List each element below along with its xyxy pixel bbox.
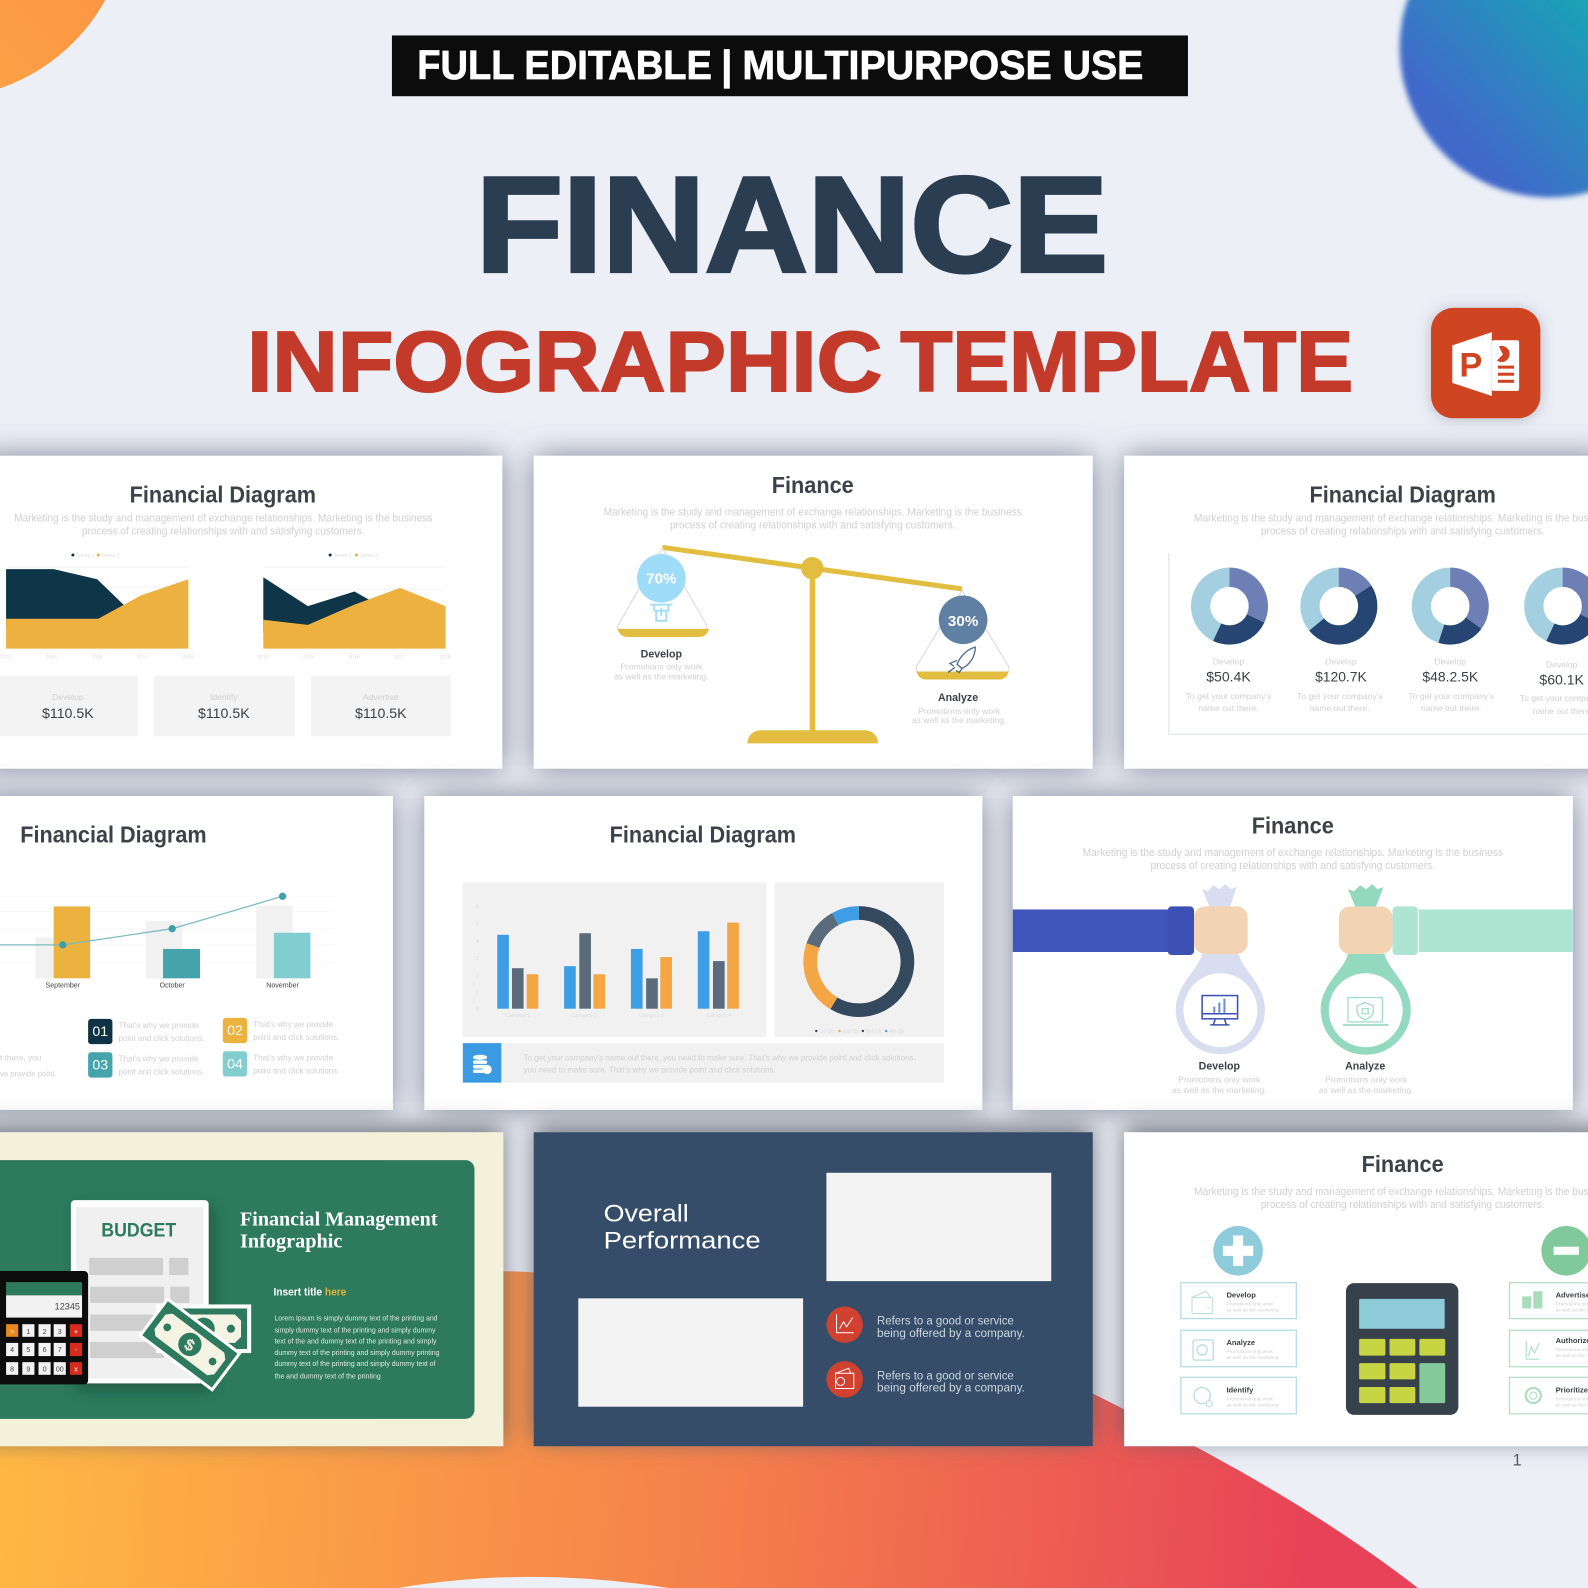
text: first point [877,1315,1025,1340]
calculator: 3 [58,1328,62,1336]
donut 2 label [1297,656,1383,713]
item identify [1181,1377,1296,1414]
description [1194,513,1588,538]
icon: PowerPoint: P [1459,347,1482,385]
grouped bar chart: Category 1 [505,1013,530,1019]
grouped bar chart: 0 [476,1007,479,1013]
area chart left: 2018 [182,654,194,660]
stat box: develop [0,676,138,736]
left pan 70% [618,548,709,637]
combo chart: October [160,981,185,989]
description: process of creating relationships with and satisfying customers. [1150,860,1435,872]
text: first point: Refers to a good or service [877,1315,1014,1328]
grouped bar chart: Category 4 [707,1013,732,1019]
cropped note: ve provide point. [0,1069,57,1079]
area chart right: 2017 [394,654,405,660]
body copy: dummy text of the printing and simply dummy printing [274,1348,440,1357]
calculator: 2 [43,1328,47,1336]
calculator: - [75,1346,78,1354]
banknotes [138,1297,251,1392]
area chart right: 2018 [440,654,451,660]
calculator illustration [1346,1283,1458,1415]
description: process of creating relationships with and satisfying customers. [1261,1199,1544,1211]
heading: Overall [604,1200,689,1227]
description [1083,847,1503,872]
heading: Performance [604,1228,761,1255]
body copy: text of the and dummy text of the printing and simply [274,1336,437,1345]
item 04: 04 [227,1056,243,1072]
item 01 [88,1019,205,1044]
stat box: advertise: Advertise [363,692,399,702]
subtitle: TEMPLATE [900,315,1353,410]
combo chart [0,893,335,989]
left hand label: as well as the marketing. [1172,1085,1267,1095]
description: Marketing is the study and management of exchange relationships. Marketing is the business [604,506,1022,518]
text: second point: Refers to a good or service [877,1369,1014,1382]
panel: calculator slide [1124,1132,1588,1446]
icon: wallet badge [826,1361,863,1398]
area chart right: Series 2 [360,553,378,559]
description [14,513,433,538]
donut 1 label: To get your company's [1186,691,1271,701]
donut 2 label: $120.7K [1315,670,1367,686]
right hand label: as well as the marketing. [1319,1085,1413,1095]
right hand label: Promotions only work [1325,1075,1408,1085]
description: Marketing is the study and management of exchange relationships. Marketing is the business [14,513,433,525]
donut 3 label: To get your company's [1408,691,1494,701]
stat box: identify: $110.5K [198,706,250,722]
area chart right: 2015 [303,654,314,660]
left hand with bag [1013,884,1265,1054]
subtitle [247,315,1353,410]
item 02: point and click solutions. [253,1032,339,1042]
item 03 [88,1052,205,1078]
area chart left: Series 1 [76,553,95,559]
item 04 [223,1051,339,1077]
description: Marketing is the study and management of exchange relationships. Marketing is the business [1083,847,1503,859]
item analyze: as well as the marketing. [1226,1355,1280,1361]
description: process of creating relationships with and satisfying customers. [82,526,365,538]
heading [604,1200,761,1255]
right hand label [1319,1060,1413,1095]
item advertise [1510,1283,1588,1319]
budget heading: Financial Management [240,1208,438,1230]
calculator: 8 [10,1365,14,1373]
panel: budget slide [0,1132,503,1446]
grouped bar chart: 6 [476,904,479,910]
green panel [0,1160,474,1419]
heading: Financial Diagram [610,822,796,848]
icon: chart badge [826,1306,863,1343]
panel: balance scale slide [534,456,1093,769]
donut 1 label [1186,656,1271,713]
donut 2 label: To get your company's [1297,691,1383,701]
calculator: 0 [43,1365,47,1373]
heading: Financial Diagram [130,481,316,507]
calculator: 5 [26,1346,30,1354]
grouped bar chart: 3 [476,956,479,962]
right pan 30% [916,590,1009,680]
item develop: Develop [1226,1290,1256,1299]
stat box: advertise: $110.5K [355,706,407,722]
calculator: 6 [43,1346,47,1354]
ring chart: 3rd Qtr [866,1029,882,1035]
body copy: dummy text of the printing and simply dummy text of [274,1359,436,1368]
body copy: the and dummy text of the printing [274,1371,381,1380]
stat box: develop: Develop [52,692,84,702]
item 03: 03 [92,1057,108,1073]
donut 3 label [1408,656,1494,713]
area chart left: 2017 [137,654,148,660]
image placeholder bottom [578,1298,803,1407]
top banner: | [721,42,732,88]
item 02: That's why we provide [253,1019,333,1029]
calculator: + [74,1328,78,1336]
calculator [0,1271,88,1384]
donut 1 [1201,577,1258,635]
donut 2 label: Develop [1325,656,1357,666]
combo chart: September [45,981,81,989]
balance scale [662,545,962,743]
item develop [1181,1283,1296,1319]
panel: grouped bars and ring slide [424,796,982,1110]
grouped bar chart: 1 [476,991,479,997]
area chart left [0,553,194,660]
axis [1169,553,1588,734]
grouped bar chart: Category 3 [639,1013,664,1019]
right pan label: as well as the marketing. [912,715,1006,725]
donut 1 label: $50.4K [1206,670,1251,686]
stat box: advertise [311,676,451,736]
item 01: point and click solutions. [118,1033,205,1043]
budget sheet: BUDGET [101,1221,176,1242]
heading: Financial Diagram [20,822,207,848]
cropped note [0,1052,57,1079]
icon: monitor [1202,996,1238,1025]
left pan label: as well as the marketing. [614,672,709,682]
heading: Financial Diagram [1309,481,1496,507]
right hand with bag [1321,884,1573,1055]
donut 3 label: Develop [1434,656,1466,666]
area chart right: 2016 [348,654,360,660]
left pan 70%: 70% [646,570,677,587]
grouped bar chart: 4 [476,939,479,945]
calculator: 1 [26,1328,30,1336]
text: second point: being offered by a company. [877,1382,1025,1395]
stat box: identify: Identify [210,692,238,702]
item prioritize [1510,1377,1588,1414]
top banner: MULTIPURPOSE USE [742,42,1143,88]
insert title: Insert title here [273,1286,346,1298]
text: first point: being offered by a company. [877,1327,1025,1340]
icon: secure laptop [1343,998,1388,1025]
ring chart: 1st Qtr [819,1029,835,1035]
item identify: as well as the marketing. [1226,1403,1280,1409]
right pan label [912,692,1006,725]
stat box: develop: $110.5K [42,706,94,722]
icon: plus [1213,1226,1263,1276]
grouped bar chart: 2 [476,973,479,979]
heading: Finance [1362,1151,1444,1177]
budget heading: Infographic [240,1231,342,1253]
stat box: identify [154,676,295,736]
item 02: 02 [227,1023,243,1039]
right pan 30%: 30% [948,613,979,630]
body copy: Lorem Ipsum is simply dummy text of the printing and [274,1314,438,1323]
panel: donut charts slide [1124,456,1588,769]
item 04: That's why we provide [253,1052,333,1062]
pale arc at the bottom edge [398,1577,668,1588]
top banner [392,35,1188,96]
area chart right: Series 1 [333,553,352,559]
donut 3 label: $48.2.5K [1422,670,1479,686]
icon: PowerPoint [1431,308,1540,418]
grouped bar chart: Category 2 [572,1013,597,1019]
body copy [274,1314,440,1380]
item 04: point and click solutions. [253,1066,339,1076]
right pan label: Analyze [938,692,978,704]
donut 3 label: name out there. [1421,703,1481,713]
donut 4 [1534,577,1588,635]
budget heading [240,1208,438,1253]
donut 4 label: Develop [1546,659,1578,669]
item 03: point and click solutions. [118,1067,205,1077]
item identify: Identify [1226,1386,1254,1395]
description: process of creating relationships with and satisfying customers. [1261,526,1544,538]
calculator: 12345 [55,1301,80,1311]
image placeholder top [826,1173,1051,1281]
ring chart [775,883,944,1037]
donut 4 label [1520,659,1588,716]
decorative blue circle top right [1400,0,1588,197]
item 01: 01 [92,1024,108,1040]
panel: hands holding money bags slide [1013,796,1573,1110]
top banner: FULL EDITABLE [417,42,712,88]
banknotes: $ [181,1335,198,1355]
calculator: x [74,1365,78,1373]
body copy: simply dummy text of the printing and simply dummy [274,1325,436,1334]
icon: minus [1541,1226,1588,1276]
area chart left: 2014 [0,654,11,660]
right pan label: Promotions only work [918,706,1001,716]
description: process of creating relationships with and satisfying customers. [670,520,956,532]
item 02 [223,1018,339,1043]
item analyze: Promotions only work [1226,1349,1273,1355]
item develop: Promotions only work [1226,1301,1273,1307]
panel: overall performance slide [534,1132,1093,1446]
calculator: 4 [10,1346,14,1354]
budget sheet [71,1200,209,1383]
ring chart: 4th Qtr [889,1029,905,1035]
item develop: as well as the marketing. [1226,1308,1280,1314]
description [604,506,1022,532]
icon: database [463,1043,501,1083]
left hand label: Promotions only work [1178,1075,1261,1085]
text: second point [877,1369,1025,1395]
item 03: That's why we provide [118,1053,199,1063]
combo chart: November [266,981,300,989]
item identify: Promotions only work [1226,1397,1273,1403]
heading: Finance [772,472,854,498]
right hand label: Analyze [1345,1060,1385,1072]
panel: bar and line chart slide [0,796,393,1110]
item authorize [1510,1330,1588,1367]
left pan label [614,648,709,682]
left hand label: Develop [1199,1060,1241,1072]
ring chart: 2nd Qtr [843,1029,860,1035]
item 01: That's why we provide [118,1020,199,1030]
item analyze [1181,1330,1296,1367]
note strip [501,1043,944,1083]
calculator: 00 [56,1365,64,1373]
donut 1 label: Develop [1213,656,1244,666]
left pan label: Develop [641,648,682,660]
area chart left: Series 2 [101,553,120,559]
left hand label [1172,1060,1267,1095]
subtitle: INFOGRAPHIC [247,315,882,410]
decorative orange circle top left [0,0,129,98]
note strip: To get your company's name out there, you need to make sure. That's why we provide point and click solutions. [524,1052,916,1062]
page number: 1 [1513,1451,1522,1469]
donut 2 [1310,577,1368,635]
donut 3 [1421,577,1479,635]
area chart right: 2014 [257,654,269,660]
item analyze: Analyze [1226,1338,1255,1347]
item prioritize: Prioritize [1556,1386,1588,1395]
area chart left: 2016 [91,654,103,660]
description [1194,1186,1588,1211]
calculator: 9 [26,1365,30,1373]
main title: FINANCE [476,148,1108,300]
donut 4 label: $60.1K [1539,673,1584,689]
donut 1 label: name out there. [1198,703,1259,713]
calculator: > [10,1328,14,1336]
area chart left: 2015 [46,654,57,660]
note strip: you need to make sure. That's why we provide point and click solutions. [524,1065,776,1075]
donut 2 label: name out there. [1310,703,1370,713]
grouped bar chart: 5 [476,922,479,928]
cropped note: t there, you [0,1052,42,1062]
calculator: 7 [58,1346,62,1354]
grouped bar chart [463,883,767,1037]
heading: Finance [1252,812,1334,838]
area chart right [257,553,451,660]
panel: area charts slide [0,456,502,769]
left pan label: Promotions only work [620,661,703,671]
orange to red gradient wave at the bottom [0,1271,1418,1588]
